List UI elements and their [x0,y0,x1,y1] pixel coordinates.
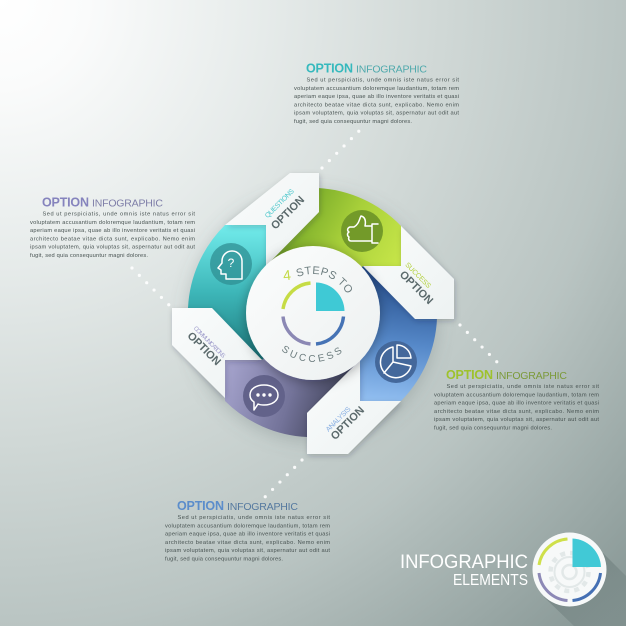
text block: top option: ipsam voluptatem, quia voluptas sit, aspernatur aut odit aut [294,110,459,116]
segment: teal [188,225,313,360]
segment: green [266,188,401,313]
text block: left option: aperiam eaque ipsa, quae ab illo inventore veritatis et quasi [30,228,195,234]
ribbon: questions: OPTION [269,194,307,232]
text block: left option: INFOGRAPHIC [92,198,163,210]
text block: right option [434,368,599,431]
heading: 4 steps to: STEPS TO [296,266,352,292]
text block: right option: voluptatem accusantium doloremque laudantium, totam rem [434,392,599,398]
text block: top option: OPTION [306,62,353,76]
text block: bottom option: Sed ut perspiciatis, unde omnis iste natus error sit [178,515,330,521]
text block: top option: voluptatem accusantium doloremque laudantium, totam rem [294,86,459,92]
ribbon: analysis: OPTION [329,404,367,443]
wheel soft shadow [189,193,437,441]
ribbon: communications: COMMUNICATIONS [192,326,226,360]
ribbon: success: OPTION [397,269,435,307]
text block: left option: fugit, sed quia consequuntur magni dolores. [30,253,148,259]
text block: top option: INFOGRAPHIC [356,64,427,76]
text block: right option: ipsam voluptatem, quia voluptas sit, aspernatur aut odit aut [434,417,599,423]
text block: top option: Sed ut perspiciatis, unde omnis iste natus error sit [306,78,459,84]
text block: top option: fugit, sed quia consequuntur magni dolores. [294,119,412,125]
chart: badge ring [539,538,601,600]
text block: left option: voluptatem accusantium doloremque laudantium, totam rem [30,220,195,226]
chart: ring and quarter sector [283,282,344,344]
heading: 4 steps to: 4 [282,267,292,283]
segment: purple [225,313,360,437]
dotted connector: left [132,268,169,305]
text block: right option: fugit, sed quia consequuntur magni dolores. [434,425,552,431]
title: infographic elements: ELEMENTS [453,572,528,589]
dotted connector: top [322,130,360,168]
segment: blue [313,266,437,401]
ribbon: success: SUCCESS [403,262,432,290]
icon: pie chart [375,341,417,383]
ribbon: analysis [307,360,401,454]
text block: bottom option: fugit, sed quia consequuntur magni dolores. [165,556,283,562]
text block: right option: architecto beatae vitae dicta sunt, explicabo. Nemo enim [434,409,599,415]
ribbon: communications: OPTION [185,330,223,368]
text block: bottom option: aperiam eaque ipsa, quae ab illo inventore veritatis et quasi [165,532,330,538]
text block: right option: INFOGRAPHIC [496,370,567,382]
text block: top option: architecto beatae vitae dicta sunt, explicabo. Nemo enim [294,102,459,108]
text block: right option: Sed ut perspiciatis, unde omnis iste natus error sit [446,384,599,390]
icon: gear [550,553,588,591]
text block: left option: Sed ut perspiciatis, unde omnis iste natus error sit [42,212,195,218]
ribbon: communications [172,308,262,398]
text block: bottom option: voluptatem accusantium doloremque laudantium, totam rem [165,523,330,529]
text block: left option: architecto beatae vitae dicta sunt, explicabo. Nemo enim [30,236,195,242]
text block: left option: ipsam voluptatem, quia voluptas sit, aspernatur aut odit aut [30,244,195,250]
heading: 4 steps to [282,266,352,292]
icon: head with question mark [210,243,252,285]
wheel [170,172,458,458]
heading: success: SUCCESS [282,346,342,362]
long shadow: badge [544,553,626,626]
text block: bottom option: ipsam voluptatem, quia voluptas sit, aspernatur aut odit aut [165,548,330,554]
text block: top option: aperiam eaque ipsa, quae ab illo inventore veritatis et quasi [294,94,459,100]
text block: bottom option: architecto beatae vitae dicta sunt, explicabo. Nemo enim [165,540,330,546]
text block: top option [294,62,459,125]
text block: bottom option: INFOGRAPHIC [227,501,298,513]
text block: right option: aperiam eaque ipsa, quae ab illo inventore veritatis et quasi [434,401,599,407]
text block: right option: OPTION [446,368,493,382]
ribbon: questions: QUESTIONS [264,188,296,220]
ribbon: questions [225,173,319,266]
badge: gear and ring [532,532,606,606]
dotted connector: right [460,325,497,362]
icon: thumbs up [341,210,383,252]
text block: bottom option [165,499,330,562]
dotted connector: bottom [265,460,302,497]
ribbon: success [363,226,454,319]
icon: speech bubble [243,375,285,417]
text block: left option [30,196,195,259]
center disc [240,242,386,387]
title: infographic elements: INFOGRAPHIC [400,551,528,573]
title: infographic elements [400,551,528,589]
ribbon: analysis: ANALYSIS [325,406,353,434]
text block: left option: OPTION [42,196,89,210]
icon: head with question mark: ? [228,256,235,270]
text block: bottom option: OPTION [177,499,224,513]
